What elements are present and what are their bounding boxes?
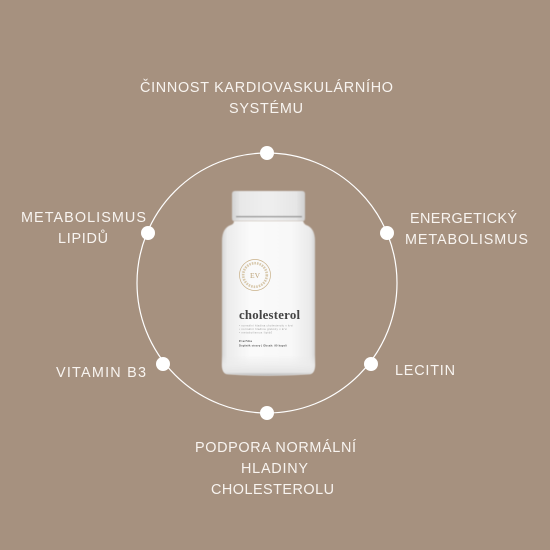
label: normal cholesterol level: CHOLESTEROLU: [211, 482, 334, 498]
brand and contents: EverVita: [239, 339, 252, 343]
ring with dots: [137, 146, 397, 420]
product name: cholesterol: [239, 308, 300, 322]
brand and contents: Doplněk stravy | Obsah: 90 kapslí: [239, 344, 287, 348]
dot: lower left: [156, 357, 170, 371]
label: lecithin: LECITIN: [395, 363, 455, 379]
dot: lower right: [364, 357, 378, 371]
label: energy metabolism: METABOLISMUS: [405, 232, 528, 248]
label: normal cholesterol level: HLADINY: [241, 461, 308, 477]
label: cardiovascular activity: ČINNOST KARDIOVASKULÁRNÍHO: [140, 79, 393, 96]
supplement bottle: [222, 191, 315, 376]
bottle cap: [232, 191, 305, 221]
product claims: • normální hladina cholesterolu v krvi: [239, 324, 293, 328]
product claims: • metabolismus lipidů: [239, 330, 272, 334]
brand and contents: [239, 339, 287, 348]
dot: bottom: [260, 406, 274, 420]
label: cardiovascular activity: SYSTÉMU: [229, 100, 303, 117]
dot: top: [260, 146, 274, 160]
dot: upper right: [380, 226, 394, 240]
product claims: [239, 324, 293, 334]
bottle base shading: [222, 355, 315, 376]
bottle body: [222, 221, 315, 376]
logo seal: [240, 260, 270, 290]
label: lipid metabolism: METABOLISMUS: [21, 210, 146, 226]
label: vitamin B3: VITAMIN B3: [56, 365, 146, 381]
dot: upper left: [141, 226, 155, 240]
label: energy metabolism: ENERGETICKÝ: [410, 210, 517, 227]
logo seal: EV: [250, 271, 261, 280]
label: normal cholesterol level: PODPORA NORMÁLNÍ: [195, 439, 356, 456]
label: lipid metabolism: LIPIDŮ: [58, 229, 108, 247]
product claims: • normální hladina glukózy v krvi: [239, 327, 287, 331]
